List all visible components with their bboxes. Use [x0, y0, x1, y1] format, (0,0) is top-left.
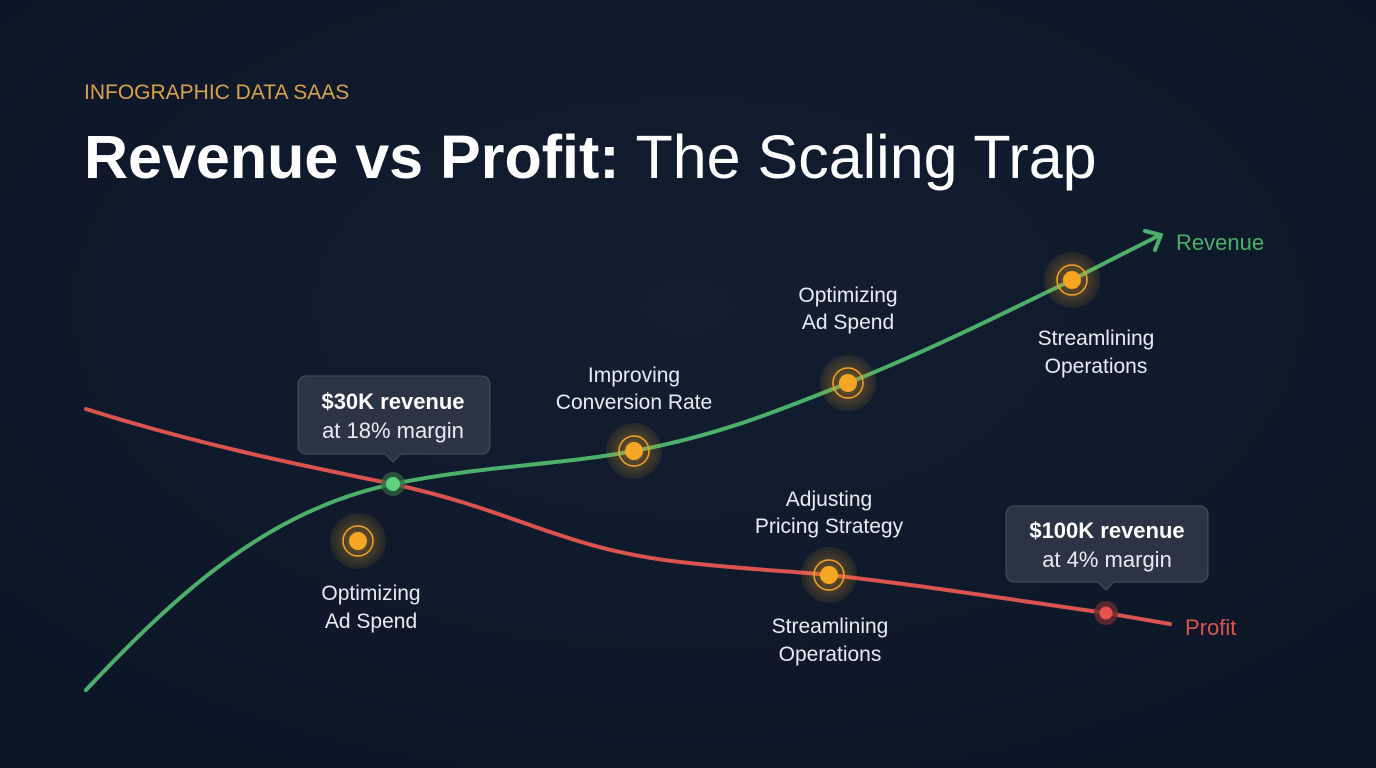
- text: Streamlining Operations lower: Operations: [779, 643, 881, 666]
- text: Optimizing Ad Spend lower: Optimizing: [321, 582, 421, 605]
- profit line: [86, 409, 1170, 624]
- revenue line with arrow: [86, 231, 1161, 690]
- marker: Streamlining Operations upper: [1044, 252, 1100, 308]
- text: Optimizing Ad Spend upper: Ad Spend: [802, 311, 894, 334]
- callout: $30K revenue: [298, 376, 490, 462]
- text: Improving Conversion Rate: Improving: [588, 364, 680, 387]
- marker: profit line mid: [801, 547, 857, 603]
- callout: $100K revenue: at 4% margin: [1042, 547, 1172, 572]
- callout: $30K revenue: $30K revenue: [321, 389, 465, 414]
- crossover point: [381, 472, 405, 496]
- label: Revenue: Revenue: [1176, 230, 1264, 255]
- text: Optimizing Ad Spend upper: Optimizing: [798, 284, 898, 307]
- marker: Optimizing Ad Spend (lower): [330, 513, 386, 569]
- text: Optimizing Ad Spend lower: Ad Spend: [325, 610, 417, 633]
- label: Profit: Profit: [1185, 615, 1236, 640]
- title: Revenue vs Profit: The Scaling Trap: [84, 123, 1097, 191]
- callout: $100K revenue: $100K revenue: [1029, 518, 1185, 543]
- text: Improving Conversion Rate: Conversion Rate: [556, 391, 712, 414]
- end point profit: [1094, 601, 1118, 625]
- callout: $30K revenue: at 18% margin: [322, 418, 464, 443]
- text: Streamlining Operations upper: Streamlining: [1038, 327, 1154, 350]
- text: Streamlining Operations upper: Operations: [1045, 355, 1147, 378]
- marker: Improving Conversion Rate: [606, 423, 662, 479]
- text: Streamlining Operations lower: Streamlining: [772, 615, 888, 638]
- callout: $100K revenue: [1006, 506, 1208, 590]
- text: Adjusting Pricing Strategy: Pricing Strategy: [755, 515, 904, 538]
- text: Adjusting Pricing Strategy: Adjusting: [786, 488, 872, 511]
- eyebrow label: INFOGRAPHIC DATA SAAS: [84, 81, 349, 104]
- marker: Optimizing Ad Spend upper: [820, 355, 876, 411]
